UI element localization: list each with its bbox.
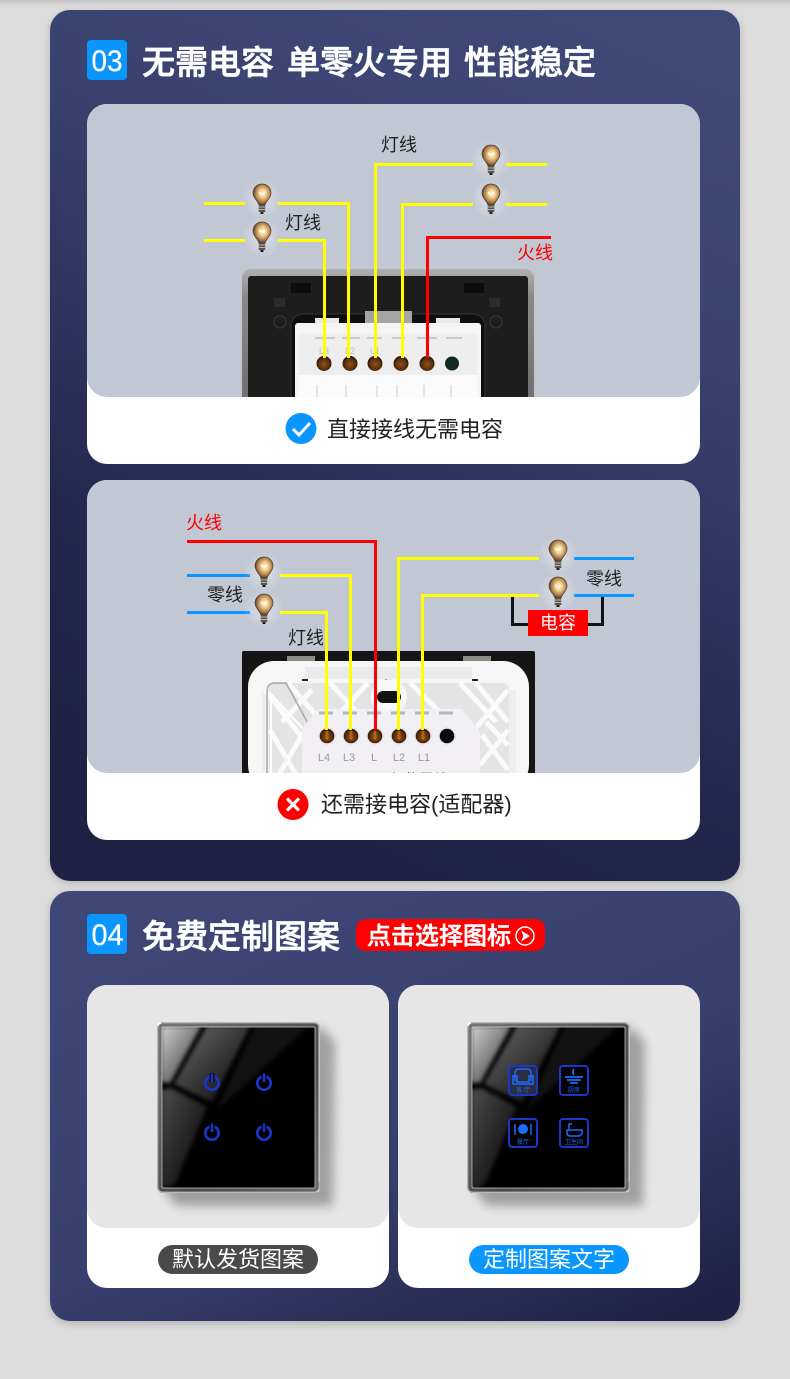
- terminal labels: L1: [418, 752, 430, 764]
- card: capacitor wiring diagram: [87, 480, 700, 840]
- icon: kitchen: [560, 1066, 588, 1095]
- icon: living room: 客 厅: [516, 1086, 530, 1094]
- panel: no capacitor needed: [50, 10, 740, 883]
- terminal screws: [316, 356, 459, 371]
- terminal screws: [318, 727, 456, 745]
- wire labels: [186, 513, 622, 648]
- wire labels: 零线: [207, 585, 243, 605]
- switch back plate, metal frame: [242, 269, 534, 409]
- heading: section 03: 性能稳定: [464, 44, 596, 81]
- heading: section 03: 无需电容: [142, 44, 274, 81]
- icon: living room: [509, 1066, 537, 1095]
- wire labels: 灯线: [288, 628, 324, 648]
- label: capacitor: 电容: [540, 613, 576, 633]
- switch with room icons: [467, 1022, 645, 1206]
- switch back plate, metal frame: L1: [370, 346, 380, 356]
- icon: dining room: 餐厅: [517, 1138, 529, 1146]
- icons: light bulbs: [244, 535, 578, 629]
- terminal labels: [318, 752, 430, 764]
- label: capacitor: [528, 610, 588, 636]
- pill: custom pattern text: 定制图案文字: [483, 1247, 615, 1272]
- heading: section 03: [87, 40, 596, 81]
- terminal labels: L3: [343, 752, 355, 764]
- switch back plate, metal frame: L2: [345, 346, 355, 356]
- wire labels: [285, 135, 553, 263]
- card: default pattern: [87, 985, 389, 1288]
- switch back plate, metal frame: L3: [319, 346, 329, 356]
- wire labels: 零线: [586, 569, 622, 589]
- switch back plate, white housing: Wi-Fi+RF智能开关: [328, 771, 448, 786]
- heading: section 03: 03: [92, 45, 122, 78]
- icon: bathroom: [560, 1119, 588, 1147]
- card: custom pattern: [398, 985, 700, 1288]
- wires: [204, 164, 551, 358]
- switch with power icons: [157, 1022, 335, 1206]
- button: choose icon: [356, 919, 545, 951]
- wires: [187, 542, 634, 730]
- heading: section 03: 单零火专用: [287, 44, 452, 81]
- wire labels: 火线: [186, 513, 222, 533]
- icon: kitchen: 厨房: [568, 1086, 580, 1094]
- terminal labels: L2: [393, 752, 405, 764]
- caption: capacitor required: 还需接电容(适配器): [321, 792, 512, 817]
- panel: free custom patterns: [50, 891, 740, 1324]
- caption: capacitor required: [278, 789, 512, 820]
- wire labels: 灯线: [285, 213, 321, 233]
- icon: dining room: [509, 1119, 537, 1147]
- caption: direct wiring: [286, 413, 503, 444]
- wire labels: 火线: [517, 243, 553, 263]
- card: direct wiring diagram: [87, 104, 700, 464]
- switch back plate, white housing: [242, 651, 535, 773]
- pill: default shipping pattern: 默认发货图案: [172, 1247, 304, 1272]
- heading: section 04: 免费定制图案: [142, 918, 340, 955]
- icons: light bulbs: [242, 140, 511, 257]
- wire labels: 灯线: [381, 135, 417, 155]
- terminal labels: L4: [318, 752, 330, 764]
- icon: bathroom: 卫生间: [565, 1138, 583, 1146]
- caption: direct wiring: 直接接线无需电容: [327, 417, 503, 442]
- button: choose icon: 点击选择图标: [367, 923, 511, 950]
- terminal labels: L: [371, 752, 377, 764]
- heading: section 04: 04: [92, 919, 124, 952]
